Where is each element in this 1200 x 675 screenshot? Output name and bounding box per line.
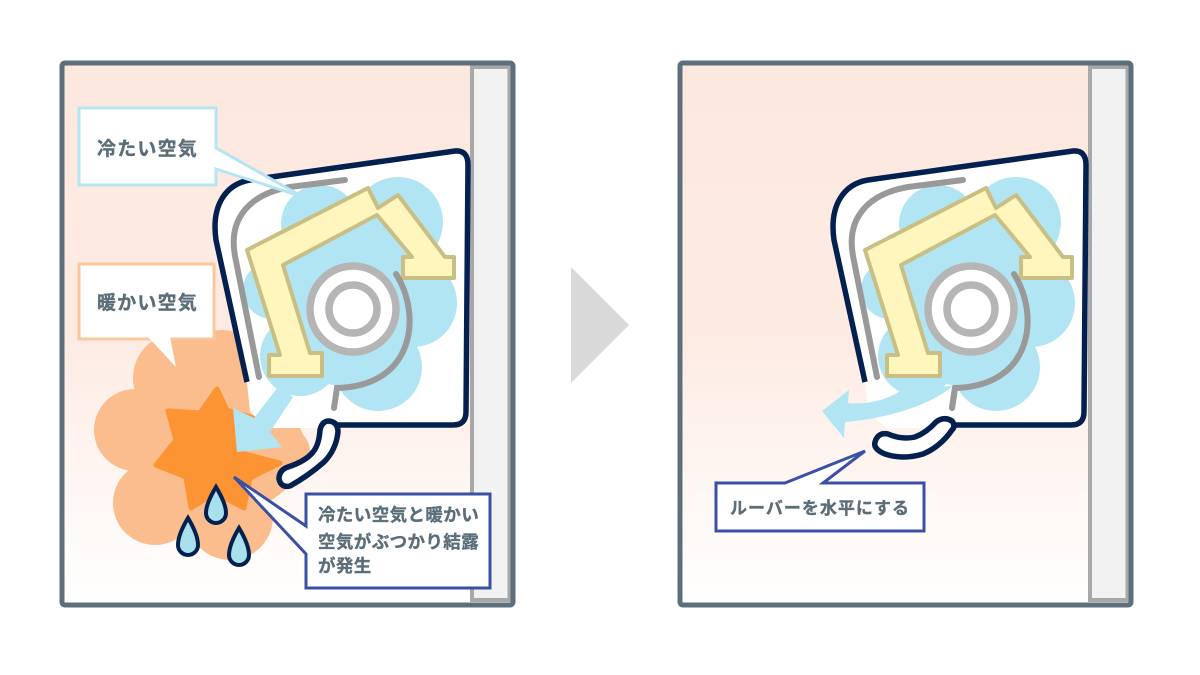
louver: horizontal xyxy=(875,419,954,457)
water drop xyxy=(229,528,249,565)
callout: warm air: 暖かい空気 xyxy=(97,292,198,314)
louver: pointing down xyxy=(279,421,338,486)
wall xyxy=(472,67,510,600)
unit: air conditioner xyxy=(214,150,470,428)
callout: warm air xyxy=(79,264,214,367)
water drop xyxy=(206,487,226,523)
callout: cold air: 冷たい空気 xyxy=(97,138,198,160)
callout: louver horizontal: ルーバーを水平にする xyxy=(730,499,910,518)
warm air cloud xyxy=(94,330,310,560)
panel: before xyxy=(62,63,513,605)
wall xyxy=(1090,67,1128,600)
water drop xyxy=(178,518,198,555)
burst star xyxy=(156,389,280,508)
frame xyxy=(62,63,513,605)
arrow: cold air horizontal xyxy=(822,386,953,438)
callout: condensation: 冷たい空気と暖かい xyxy=(318,505,479,525)
callout: condensation: 空気がぶつかり結露 xyxy=(318,532,479,552)
callout: cold air xyxy=(79,108,303,197)
callout: condensation: が発生 xyxy=(318,556,372,576)
callout: louver horizontal xyxy=(716,451,924,531)
panel: after xyxy=(680,63,1131,605)
unit: air conditioner xyxy=(832,150,1088,428)
louver stem xyxy=(952,388,955,408)
callout: condensation xyxy=(234,477,490,588)
arrow: cold air downward xyxy=(233,387,293,452)
arrow: before to after xyxy=(571,267,629,383)
frame xyxy=(680,63,1131,605)
